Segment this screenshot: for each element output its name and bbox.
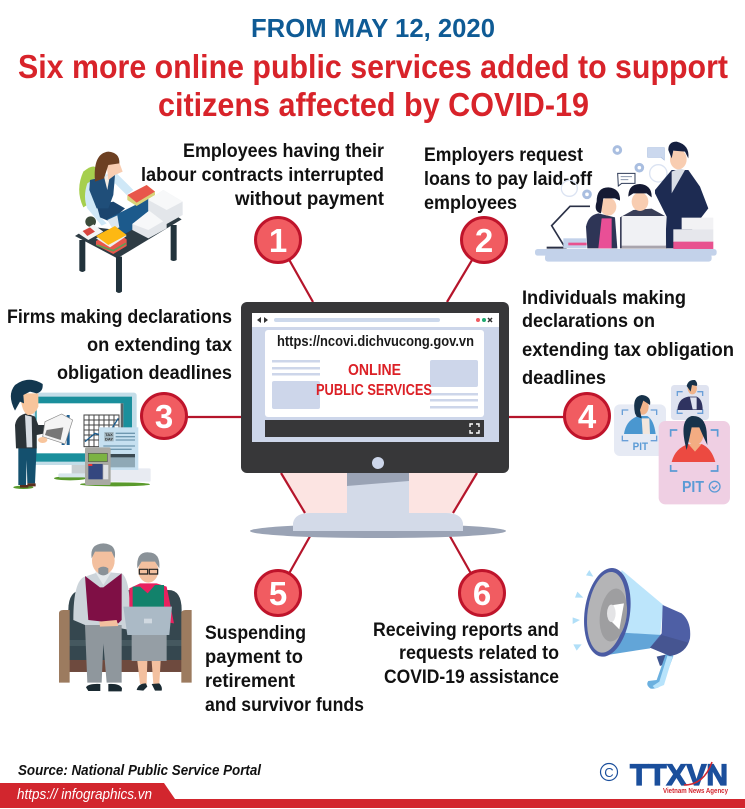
text: service 1: [141, 141, 385, 210]
text: service 4: [522, 288, 734, 389]
text: service 3: [7, 307, 232, 384]
text: service 2: employees: [424, 193, 517, 214]
TTXVN logo: Vietnam News Agency: [663, 786, 729, 795]
footer band: [0, 783, 745, 808]
screen heading: ONLINE: [348, 362, 401, 379]
TTXVN logo: TTXVN: [630, 759, 728, 792]
text: service 4: extending tax obligation: [522, 340, 734, 361]
number badge 2: 2: [475, 222, 493, 259]
number badge 5: 5: [269, 575, 287, 612]
screen heading: [316, 362, 432, 399]
text: service 1: Employees having their: [183, 141, 385, 162]
text: service 5: Suspending: [205, 623, 306, 644]
monitor: [241, 302, 509, 538]
text: service 4: declarations on: [522, 311, 655, 332]
text: service 3: obligation deadlines: [57, 363, 232, 384]
number badge 4: [564, 394, 610, 438]
text: service 6: requests related to: [399, 643, 559, 664]
text: service 6: COVID-19 assistance: [384, 667, 559, 688]
text: service 4: Individuals making: [522, 288, 686, 309]
source note: Source: National Public Service Portal: [18, 763, 262, 779]
icon: PIT identity cards: PIT: [633, 441, 648, 453]
title: [18, 13, 728, 123]
text: service 5: payment to: [205, 647, 303, 668]
text: service 5: retirement: [205, 671, 296, 692]
text: service 6: [373, 620, 559, 688]
text: service 1: without payment: [234, 189, 385, 210]
text: service 2: loans to pay laid-off: [424, 169, 593, 190]
monitor stand: [250, 473, 506, 538]
number badge 1: 1: [269, 222, 287, 259]
TTXVN logo: C: [604, 765, 614, 780]
number badge 3: 3: [155, 398, 173, 435]
number badge 4: 4: [578, 398, 597, 435]
title: citizens affected by COVID-19: [158, 86, 589, 123]
text: service 1: labour contracts interrupted: [141, 165, 384, 186]
number badge 3: [142, 394, 186, 438]
portal URL: https://ncovi.dichvucong.gov.vn: [277, 334, 474, 350]
number badge 6: 6: [473, 575, 491, 612]
title: FROM MAY 12, 2020: [251, 13, 495, 43]
connector lines: [164, 240, 587, 593]
text: service 5: and survivor funds: [205, 695, 364, 716]
screen heading: PUBLIC SERVICES: [316, 382, 432, 399]
icon: employers at laptop: [535, 142, 717, 262]
number badge 5: [256, 570, 300, 616]
icon: businessman with tax documents: DAY: [105, 436, 113, 441]
number badge 2: [462, 218, 506, 262]
text: service 2: Employers request: [424, 145, 584, 166]
icon: businessman with tax documents: [11, 380, 151, 489]
text: service 6: Receiving reports and: [373, 620, 559, 641]
monitor stand glow: [281, 473, 477, 513]
icon: stressed woman at desk: [75, 152, 183, 293]
footer band: https:// infographics.vn: [17, 786, 152, 803]
text: service 5: [205, 623, 364, 716]
icon: businessman with tax documents: TAX: [105, 432, 113, 437]
number badge 1: [256, 218, 300, 262]
icon: PIT identity cards: PIT: [682, 479, 705, 496]
number badge 6: [460, 570, 504, 616]
icon: elderly couple on sofa: [59, 543, 192, 691]
text: service 3: on extending tax: [87, 335, 232, 356]
icon: PIT identity cards: [614, 380, 730, 504]
icon: megaphone: [573, 565, 690, 689]
text: service 4: deadlines: [522, 368, 606, 389]
text: service 3: Firms making declarations: [7, 307, 232, 328]
text: service 2: [424, 145, 593, 214]
